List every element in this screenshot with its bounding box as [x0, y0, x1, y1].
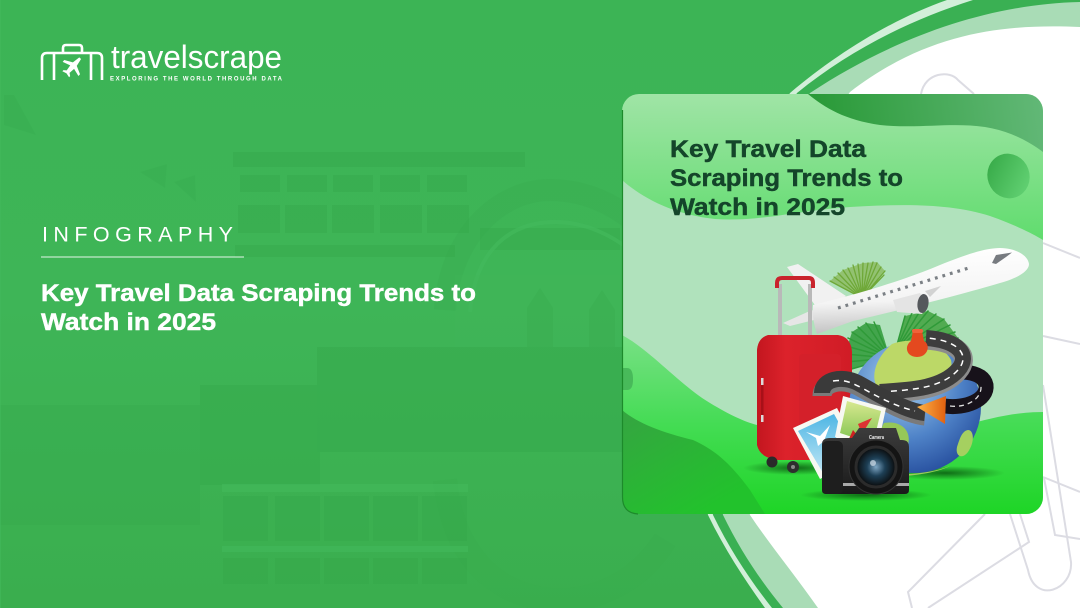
infography label: INFOGRAPHY [42, 222, 233, 246]
divider under label [41, 256, 244, 258]
faded building photo [446, 102, 1040, 494]
plane outline watermark [908, 74, 1080, 608]
card heading [670, 136, 903, 221]
tagline: EXPLORING THE WORLD THROUGH DATA [110, 76, 283, 82]
main heading: Key Travel Data Scraping Trends to [41, 280, 476, 307]
icon: globe [849, 341, 981, 477]
main heading [41, 280, 476, 336]
wordmark: travelscrape [111, 39, 282, 75]
card left edge [622, 110, 638, 514]
main heading: Watch in 2025 [41, 309, 216, 336]
icon: orange arrow [917, 396, 946, 424]
card background waves [622, 94, 1043, 514]
card heading: Watch in 2025 [670, 194, 845, 221]
icon: red suitcase [757, 278, 852, 473]
icon: palm leaves [830, 262, 958, 370]
icon: camera [822, 428, 909, 494]
card heading: Scraping Trends to [670, 165, 903, 192]
icon: winding road [822, 338, 986, 416]
icon: photo with birds [793, 408, 863, 479]
icon: photo with plants [835, 396, 886, 450]
logo [42, 39, 283, 82]
card heading: Key Travel Data [670, 136, 866, 163]
panel: infographic cover card [622, 94, 1043, 514]
icon: map pin [907, 329, 928, 357]
icon: camera: Camera [869, 435, 884, 441]
icon: airplane [783, 248, 1029, 334]
ground shadows [743, 461, 1005, 501]
icon: suitcase with plane [42, 45, 102, 81]
